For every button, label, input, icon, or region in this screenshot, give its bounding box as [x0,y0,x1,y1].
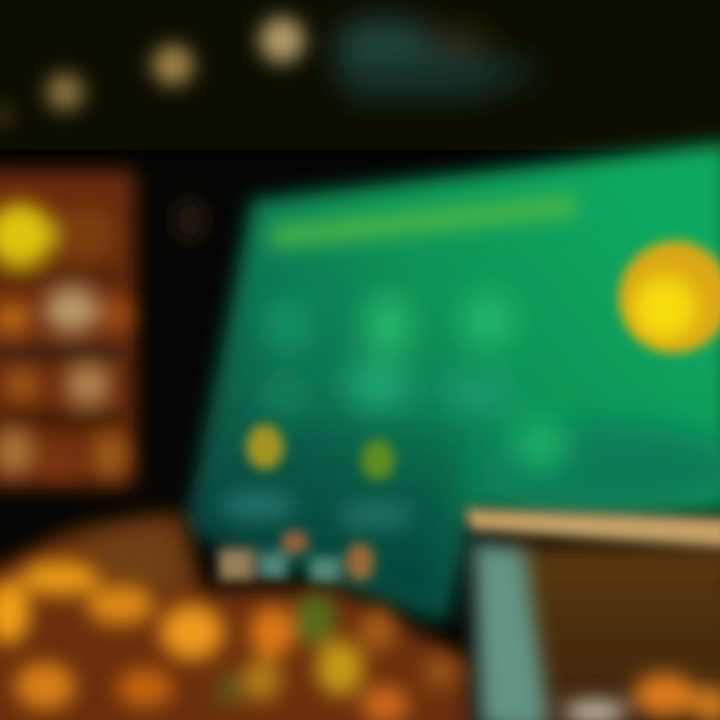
cup body [510,545,720,720]
board title band [270,194,578,248]
board columns [261,294,566,469]
small tags above produce [218,530,375,583]
dark teal ceiling fixture [330,20,550,98]
shelf item: yellow lamp [0,203,54,267]
cup glass side [472,540,550,720]
cup rim [465,508,720,548]
ceiling lights [0,17,305,124]
shelf panel [0,170,135,488]
dark pillar glow [172,196,208,244]
green board [185,142,720,620]
produce pile [0,515,470,720]
cup fruit [563,673,720,720]
board yellow markers [246,424,395,481]
cup [465,508,720,720]
board lower labels [220,489,413,529]
yellow circle badge [619,241,720,353]
